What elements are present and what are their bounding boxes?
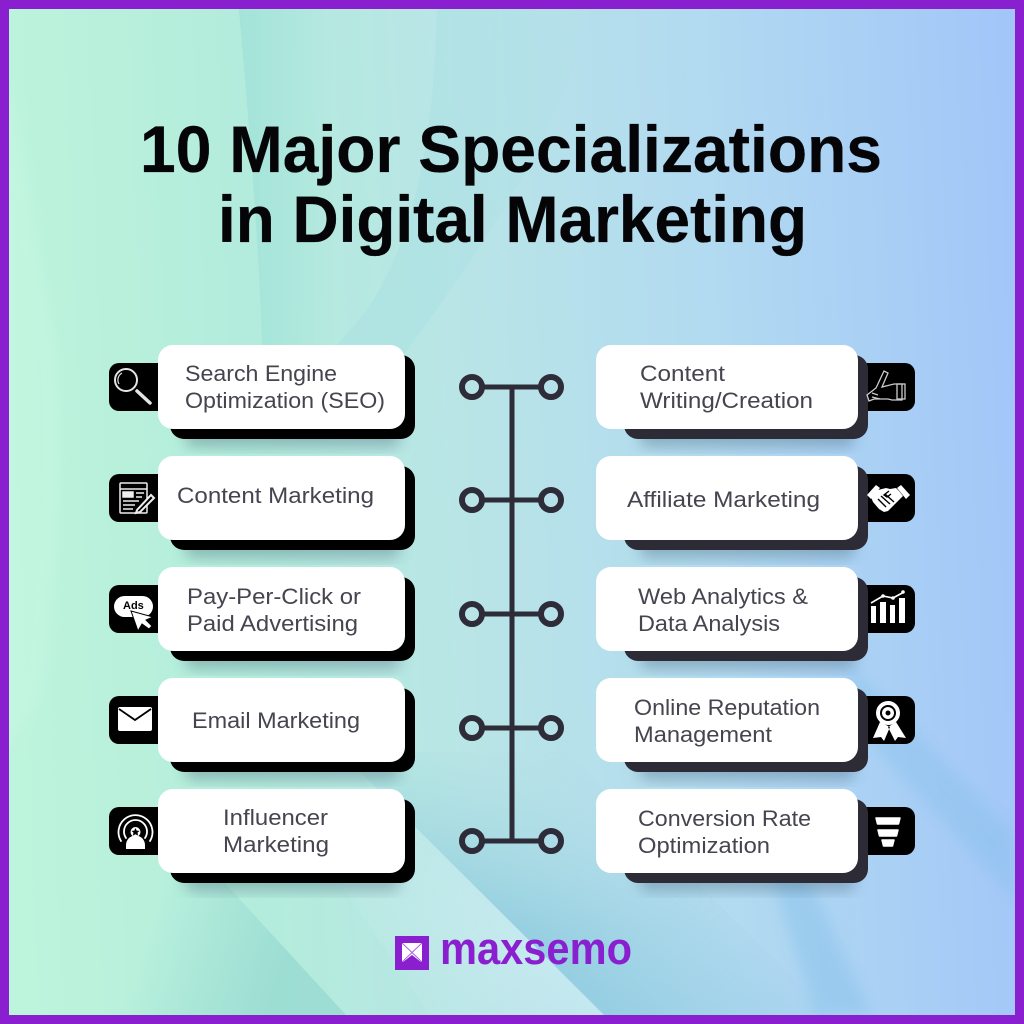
icon: ads bubble with cursor: Ads	[123, 600, 144, 612]
card: Conversion Rate Optimization: Optimization	[638, 833, 770, 858]
card: Online Reputation Management: Management	[634, 722, 773, 747]
icon: bar chart with trend line	[871, 590, 905, 623]
card: Influencer Marketing: Marketing	[223, 832, 329, 857]
card: Search Engine Optimization: Optimization (SEO)	[185, 388, 385, 413]
card: Content Marketing: Content Marketing	[177, 483, 374, 508]
icon: hand writing	[867, 371, 905, 401]
card: Conversion Rate Optimization	[596, 789, 915, 891]
title: in Digital Marketing	[218, 182, 807, 256]
icon: envelope	[118, 707, 152, 731]
logo: maxsemo: maxsemo	[440, 923, 632, 974]
icon: handshake	[867, 485, 910, 512]
card: Web Analytics and Data Analysis: Web Analytics &	[638, 584, 808, 609]
title	[140, 112, 882, 256]
icon: award ribbon	[873, 701, 906, 741]
card: Pay-Per-Click or Paid Advertising: Pay-Per-Click or	[187, 584, 362, 609]
card: Content Writing/Creation	[596, 345, 915, 447]
card: Affiliate Marketing	[596, 456, 915, 558]
card: Online Reputation Management	[596, 678, 915, 780]
card: Search Engine Optimization: Search Engine	[185, 361, 337, 386]
card: Influencer Marketing	[109, 789, 415, 891]
card: Web Analytics and Data Analysis: Data Analysis	[638, 611, 780, 636]
icon: funnel	[876, 818, 900, 846]
card: Affiliate Marketing: Affiliate Marketing	[627, 487, 820, 512]
icon: ads bubble with cursor	[114, 596, 153, 631]
card: Web Analytics and Data Analysis	[596, 567, 915, 669]
card: Influencer Marketing: Influencer	[223, 805, 329, 830]
title: 10 Major Specializations	[140, 112, 882, 186]
card: Online Reputation Management: Online Reputation	[634, 695, 820, 720]
card: Pay-Per-Click or Paid Advertising: Paid Advertising	[187, 611, 358, 636]
card: Pay-Per-Click or Paid Advertising	[109, 567, 415, 669]
icon: influencer broadcast	[118, 815, 152, 849]
icon: magnifying glass	[115, 369, 150, 403]
card: Content Writing/Creation: Writing/Creation	[640, 388, 813, 413]
central connector diagram	[462, 377, 561, 851]
card: Email Marketing	[109, 678, 415, 780]
card: Content Marketing	[109, 456, 415, 558]
card: Email Marketing: Email Marketing	[192, 708, 360, 733]
icon: article with pencil	[120, 483, 154, 513]
card: Content Writing/Creation: Content	[640, 361, 726, 386]
card: Conversion Rate Optimization: Conversion Rate	[638, 806, 811, 831]
card: Search Engine Optimization	[109, 345, 415, 447]
